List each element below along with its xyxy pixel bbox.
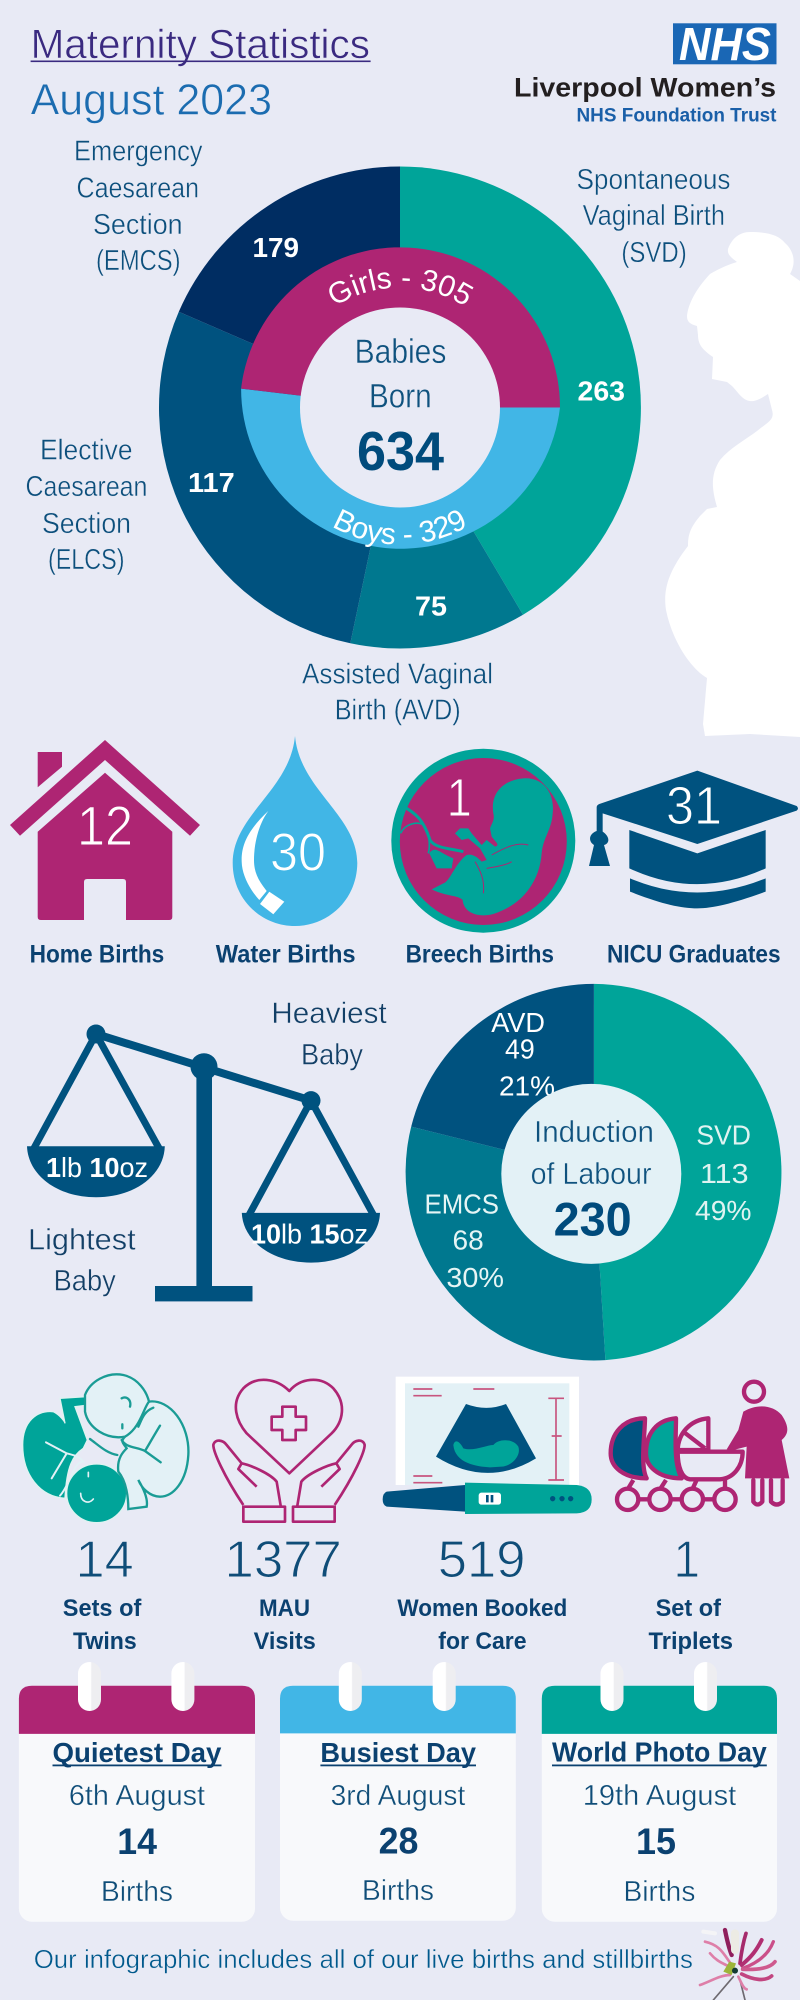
date: 6th August (69, 1780, 205, 1812)
segment label: SVD (695, 1119, 752, 1226)
panel: busiest day calendar (280, 1662, 516, 1921)
stat: triplets: Set of (656, 1595, 722, 1622)
stat: triplets (648, 1531, 733, 1655)
births label: Births (624, 1876, 695, 1908)
label: AVD: Birth (AVD) (335, 695, 461, 727)
label: heaviest baby: Heaviest (271, 997, 387, 1030)
segment label: AVD: 21% (499, 1070, 555, 1101)
ring label: girls: Girls - 305 (329, 268, 474, 304)
logo: NHS Liverpool Women's: Liverpool Women’s (514, 72, 776, 102)
stat: MAU visits: 1377 (224, 1531, 342, 1589)
centre total (531, 1114, 654, 1245)
heading: World Photo Day (552, 1736, 767, 1768)
panel: quietest day calendar (19, 1662, 255, 1922)
lightest weight: 1lb 10oz (46, 1152, 148, 1183)
stat: MAU visits (224, 1531, 342, 1655)
icon: honeysuckle flower (700, 1930, 775, 2000)
heaviest weight: 10lb 15oz (251, 1218, 368, 1250)
caption: water births: Water Births (216, 941, 356, 969)
label: SVD (576, 164, 730, 269)
stat: women booked (397, 1531, 567, 1655)
centre total (355, 333, 446, 482)
silhouette: pregnant woman (665, 232, 800, 737)
label: EMCS (74, 136, 203, 277)
label: AVD (302, 658, 493, 727)
label: lightest baby: Baby (54, 1264, 116, 1297)
icon: breech births (391, 749, 575, 933)
icon: home births: 12 (77, 794, 133, 857)
icon: caring hands and heart (213, 1380, 365, 1522)
date: 19th August (583, 1780, 736, 1812)
title: Maternity Statistics (31, 21, 370, 67)
value: ELCS: 117 (188, 467, 235, 498)
centre total: Induction (534, 1114, 654, 1149)
label: ELCS: (ELCS) (48, 544, 124, 576)
stat: women booked: Women Booked (397, 1595, 567, 1622)
heading: Quietest Day (52, 1737, 222, 1768)
births label: Births (101, 1876, 173, 1908)
stat: women booked: for Care (438, 1628, 526, 1655)
stat: twins: Twins (73, 1628, 137, 1655)
segment label: AVD (491, 1007, 555, 1101)
stat: twins (63, 1531, 142, 1655)
segment label: SVD: 49% (695, 1195, 752, 1226)
value: AVD: 75 (415, 590, 447, 622)
logo: NHS Liverpool Women's: NHS (679, 18, 771, 70)
label: ELCS: Section (42, 508, 131, 540)
chart: induction of labour donut (406, 984, 781, 1360)
label: SVD: Spontaneous (576, 164, 730, 196)
logo: NHS Liverpool Women's (514, 18, 777, 126)
segment label: AVD: 49 (505, 1034, 535, 1065)
value: EMCS: 179 (252, 232, 299, 263)
icon: NICU graduates cap: 31 (666, 776, 722, 836)
stat: women booked: 519 (438, 1531, 526, 1589)
segment label: EMCS: EMCS (424, 1189, 499, 1220)
centre total: Born (369, 377, 432, 415)
label: heaviest baby: Baby (301, 1039, 363, 1072)
births label: Births (362, 1875, 434, 1907)
icon: breech births: 1 (447, 768, 472, 828)
logo: NHS Liverpool Women's: NHS Foundation Trust (576, 106, 777, 126)
stat: triplets: Triplets (648, 1628, 733, 1655)
centre total: 230 (554, 1192, 632, 1245)
births value: 28 (379, 1820, 418, 1861)
subtitle: month: August 2023 (31, 76, 272, 124)
label: EMCS: (EMCS) (96, 245, 181, 277)
caption: breech births: Breech Births (406, 941, 554, 969)
value: SVD: 263 (578, 375, 625, 406)
chart: weight scales (27, 1024, 380, 1301)
panel: world photo day calendar (542, 1662, 777, 1922)
icon: triplets pram (611, 1382, 789, 1510)
icon: NICU graduates cap (589, 771, 798, 908)
stat: MAU visits: MAU (259, 1595, 310, 1622)
births value: 14 (117, 1821, 157, 1862)
date: 3rd August (331, 1780, 465, 1812)
stat: triplets: 1 (674, 1531, 700, 1589)
stat: twins: Sets of (63, 1595, 142, 1622)
icon: home births (10, 740, 200, 920)
segment label: SVD: 113 (700, 1158, 748, 1189)
label: EMCS: Section (93, 209, 183, 241)
centre total: 634 (357, 420, 444, 482)
births value: 15 (636, 1821, 676, 1862)
chart: births donut (159, 166, 641, 648)
label: ELCS: Caesarean (26, 471, 147, 503)
icon: twins (23, 1374, 188, 1523)
centre total: of Labour (531, 1156, 652, 1191)
footnote: Our infographic includes all of our live births and stillbirths (34, 1944, 693, 1974)
segment label: EMCS (424, 1189, 504, 1293)
label: SVD: (SVD) (621, 237, 687, 269)
label: EMCS: Caesarean (76, 172, 199, 204)
stat: twins: 14 (76, 1531, 134, 1589)
caption: NICU graduates: NICU Graduates (607, 941, 781, 969)
label: EMCS: Emergency (74, 136, 203, 168)
segment label: EMCS: 30% (446, 1262, 504, 1293)
label: AVD: Assisted Vaginal (302, 658, 493, 690)
caption: home births: Home Births (30, 941, 164, 969)
label: lightest baby: Lightest (28, 1224, 136, 1257)
label: SVD: Vaginal Birth (583, 200, 725, 232)
label: ELCS: Elective (40, 434, 133, 466)
stat: MAU visits: Visits (254, 1628, 316, 1655)
label: ELCS (26, 434, 147, 576)
label: heaviest baby (271, 997, 387, 1072)
heading: Busiest Day (320, 1737, 476, 1768)
icon: water births (233, 736, 357, 926)
ring label: boys: Boys - 329 (334, 509, 464, 547)
label: lightest baby (28, 1224, 136, 1297)
icon: water births: 30 (270, 823, 326, 883)
segment label: SVD: SVD (696, 1119, 751, 1150)
segment label: EMCS: 68 (452, 1225, 484, 1256)
centre total: Babies (355, 333, 446, 371)
segment label: AVD: AVD (491, 1007, 545, 1038)
icon: ultrasound and pregnancy test (383, 1377, 592, 1514)
